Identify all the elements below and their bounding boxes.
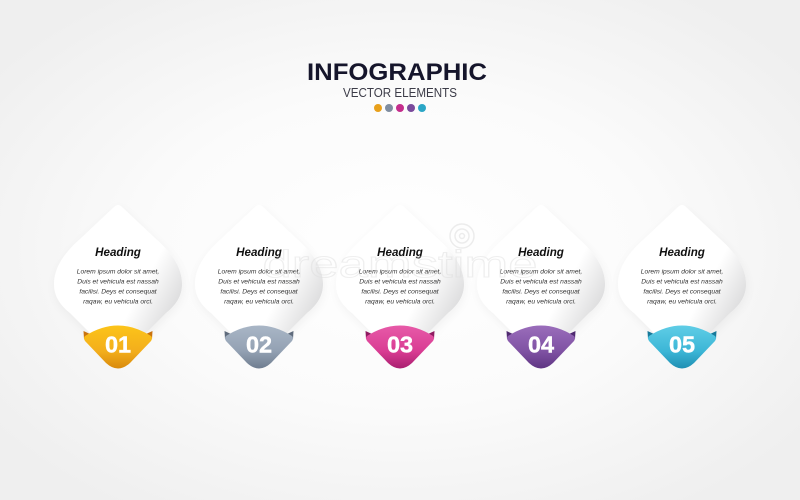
- card shape: [618, 205, 746, 359]
- body text: [218, 268, 300, 306]
- heading: infographic: INFOGRAPHIC: [307, 59, 487, 86]
- body text: raqaw, eu vehicula orci.: [224, 298, 294, 306]
- body text: Lorem ipsum dolor sit amet,: [77, 268, 159, 276]
- number badge: 03: [387, 332, 413, 358]
- watermark: dreamstime: [262, 244, 538, 286]
- body text: Lorem ipsum dolor sit amet,: [641, 268, 723, 276]
- number badge: [84, 326, 152, 368]
- panel: step 01: [54, 205, 182, 368]
- panel: step 05: [618, 205, 746, 368]
- heading: Heading: [377, 246, 423, 259]
- heading: Heading: [236, 246, 282, 259]
- body text: raqaw, eu vehicula orci.: [506, 298, 576, 306]
- number badge: [648, 326, 716, 368]
- number badge: 05: [669, 332, 695, 358]
- card shape: [54, 205, 182, 359]
- body text: Duis et vehicula est nassah: [641, 278, 723, 286]
- number badge: 02: [246, 332, 272, 358]
- body text: [77, 268, 159, 306]
- body text: Duis et vehicula est nassah: [218, 278, 300, 286]
- watermark: [262, 224, 538, 286]
- body text: raqaw, eu vehicula orci.: [365, 298, 435, 306]
- body text: Lorem ipsum dolor sit amet,: [218, 268, 300, 276]
- body text: raqaw, eu vehicula orci.: [647, 298, 717, 306]
- panel: step 04: [477, 205, 605, 368]
- number badge: [366, 326, 434, 368]
- body text: facilisi. Deys et consequat: [502, 288, 581, 296]
- heading: Heading: [659, 246, 705, 259]
- number badge: 01: [105, 332, 131, 358]
- body text: facilisi. Deys et consequat: [220, 288, 299, 296]
- subheading: vector elements: VECTOR ELEMENTS: [343, 86, 457, 100]
- card shape: [336, 205, 464, 359]
- body text: facilisi. Deys et consequat: [79, 288, 158, 296]
- card shape: [477, 205, 605, 359]
- body text: [641, 268, 723, 306]
- number badge: 04: [528, 332, 554, 358]
- heading: Heading: [95, 246, 141, 259]
- panel: step 02: [195, 205, 323, 368]
- body text: Duis et vehicula est nassah: [359, 278, 441, 286]
- body text: Duis et vehicula est nassah: [77, 278, 159, 286]
- number badge: [506, 326, 576, 368]
- title: [307, 59, 487, 112]
- heading: Heading: [518, 246, 564, 259]
- body text: facilisi. Deys et consequat: [643, 288, 722, 296]
- colour dots: [374, 104, 426, 112]
- body text: [500, 268, 582, 306]
- body text: facilisi. Deys et consequat: [361, 288, 440, 296]
- body text: Lorem ipsum dolor sit amet,: [359, 268, 441, 276]
- body text: Lorem ipsum dolor sit amet,: [500, 268, 582, 276]
- panel: step 03: [336, 205, 464, 368]
- card shape: [195, 205, 323, 359]
- number badge: [224, 326, 294, 368]
- body text: [359, 268, 441, 306]
- body text: raqaw, eu vehicula orci.: [83, 298, 153, 306]
- body text: Duis et vehicula est nassah: [500, 278, 582, 286]
